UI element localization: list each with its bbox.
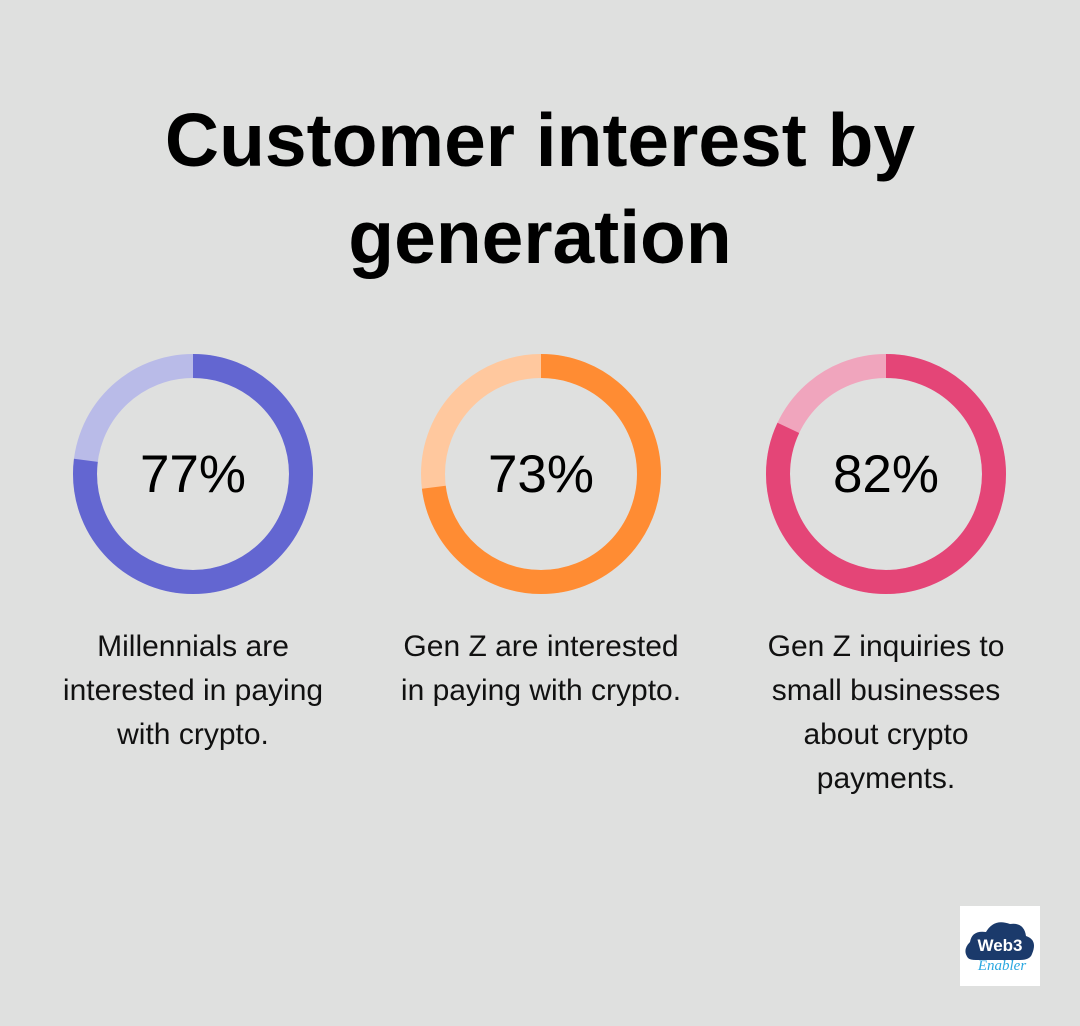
logo: Web3 Enabler: Enabler bbox=[977, 958, 1026, 974]
donut: gen z inquiries 82% bbox=[766, 354, 1006, 594]
title: generation bbox=[348, 195, 732, 279]
donut: millennials 77% bbox=[73, 354, 313, 594]
caption: millennials bbox=[63, 630, 323, 751]
logo: Web3 Enabler bbox=[960, 906, 1040, 986]
caption: millennials: interested in paying bbox=[63, 674, 323, 707]
title: Customer interest by bbox=[165, 98, 915, 182]
donut: gen z 73% bbox=[421, 354, 661, 594]
title bbox=[165, 98, 915, 279]
caption: millennials: Millennials are bbox=[97, 630, 289, 663]
caption: gen z: Gen Z are interested bbox=[403, 630, 679, 663]
caption: gen z inquiries: payments. bbox=[817, 762, 955, 795]
donut: gen z inquiries 82%: 82% bbox=[833, 445, 939, 504]
caption: gen z inquiries bbox=[768, 630, 1004, 795]
caption: gen z inquiries: small businesses bbox=[772, 674, 1000, 707]
caption: millennials: with crypto. bbox=[117, 718, 269, 751]
caption: gen z inquiries: about crypto bbox=[803, 718, 969, 751]
caption: gen z inquiries: Gen Z inquiries to bbox=[768, 630, 1004, 663]
caption: gen z bbox=[401, 630, 681, 707]
logo: Web3 Enabler: Web3 bbox=[977, 936, 1023, 955]
caption: gen z: in paying with crypto. bbox=[401, 674, 681, 707]
donut: millennials 77%: 77% bbox=[140, 445, 246, 504]
donut: gen z 73%: 73% bbox=[488, 445, 594, 504]
